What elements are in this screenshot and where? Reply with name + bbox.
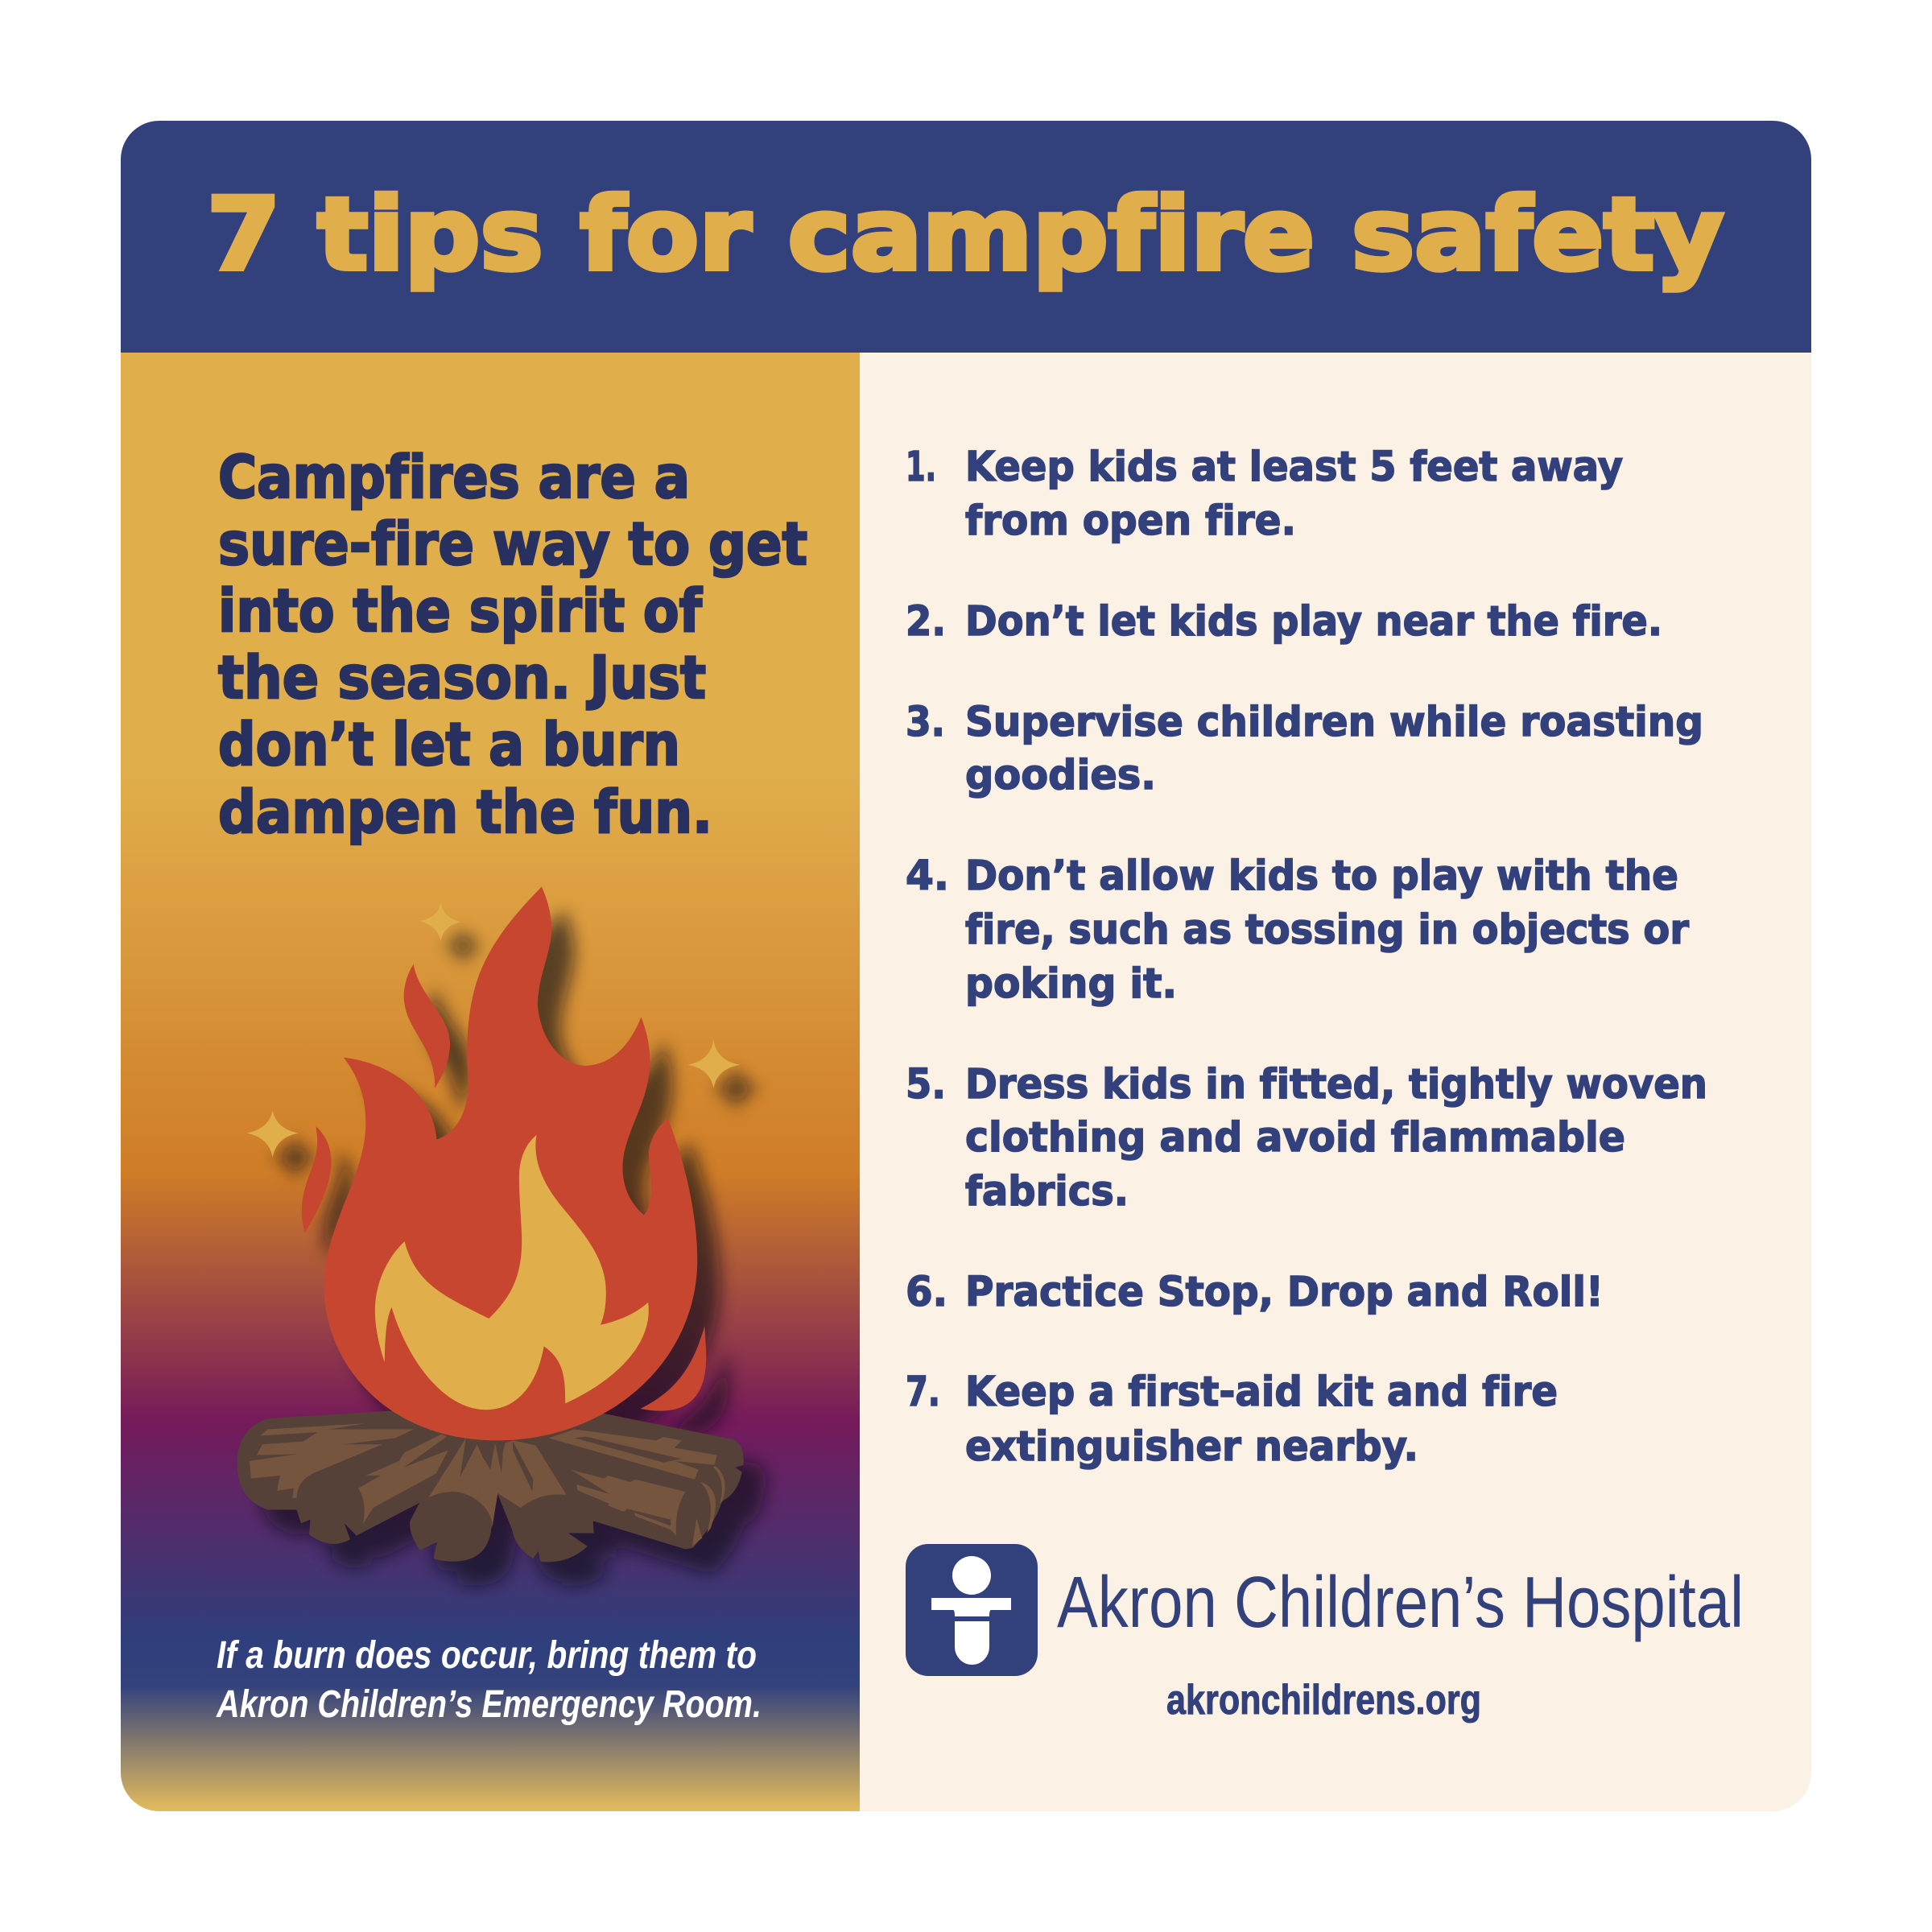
burn note [216, 1634, 762, 1726]
tip 4 [906, 852, 1689, 1008]
burn note: Akron Children’s Emergency Room. [216, 1683, 762, 1726]
tip 4: fire, such as tossing in objects or [965, 906, 1689, 954]
tip 3 [906, 699, 1703, 799]
burn note: If a burn does occur, bring them to [217, 1634, 757, 1677]
intro text: don’t let a burn [218, 711, 680, 779]
tip 2: 2. [906, 598, 946, 646]
logs [237, 1410, 744, 1562]
illustration: campfire [237, 887, 766, 1586]
tip 1: 1. [906, 444, 936, 491]
title: 7 tips for campfire safety [207, 177, 1724, 293]
tip 1: Keep kids at least 5 feet away [965, 444, 1623, 491]
tip 5 [906, 1061, 1707, 1216]
intro text [218, 444, 807, 847]
tip 3: goodies. [965, 752, 1156, 799]
tip 7 [906, 1368, 1558, 1471]
tip 5: Dress kids in fitted, tightly woven [965, 1061, 1707, 1108]
campfire shadow [260, 911, 766, 1586]
tip 4: 4. [906, 852, 949, 900]
sparkle: left [246, 1110, 299, 1158]
intro text: Campfires are a [218, 444, 690, 512]
sparkle: right [687, 1040, 740, 1088]
website: akronchildrens.org [1166, 1677, 1481, 1724]
tip 6: 6. [906, 1269, 947, 1316]
intro text: dampen the fun. [218, 778, 712, 847]
tip 3: 3. [906, 699, 945, 746]
flame: right lick [641, 1326, 706, 1411]
tip 2: Don’t let kids play near the fire. [965, 598, 1662, 646]
tip 7: extinguisher nearby. [965, 1423, 1418, 1471]
panel: gradient sky [121, 353, 860, 1811]
panel: tips background [860, 353, 1811, 1811]
flame: inner [375, 1135, 649, 1410]
tip 7: Keep a first-aid kit and fire [965, 1368, 1558, 1416]
tip 4: poking it. [965, 960, 1177, 1008]
tip 1: from open fire. [965, 497, 1296, 545]
flame: left lick [302, 1126, 332, 1233]
tip 7: 7. [906, 1368, 940, 1416]
icon: hospital logo [906, 1544, 1038, 1676]
tip 4: Don’t allow kids to play with the [965, 852, 1678, 900]
tip 5: clothing and avoid flammable [965, 1114, 1625, 1162]
tips list [906, 444, 1707, 1471]
card background [121, 121, 1811, 1811]
tip 6: Practice Stop, Drop and Roll! [965, 1269, 1604, 1316]
tip 5: fabrics. [965, 1168, 1129, 1216]
flame: outer [324, 887, 697, 1440]
tip 5: 5. [906, 1061, 946, 1108]
tip 3: Supervise children while roasting [965, 699, 1703, 746]
hospital name: Akron Children’s Hospital [1057, 1563, 1744, 1643]
intro text: the season. Just [218, 644, 706, 712]
sparkle: top [419, 902, 460, 941]
header band [121, 121, 1811, 353]
intro text: sure-fire way to get [218, 510, 807, 579]
tip 1 [906, 444, 1623, 545]
intro text: into the spirit of [218, 577, 703, 646]
flame: top lick [404, 964, 450, 1088]
